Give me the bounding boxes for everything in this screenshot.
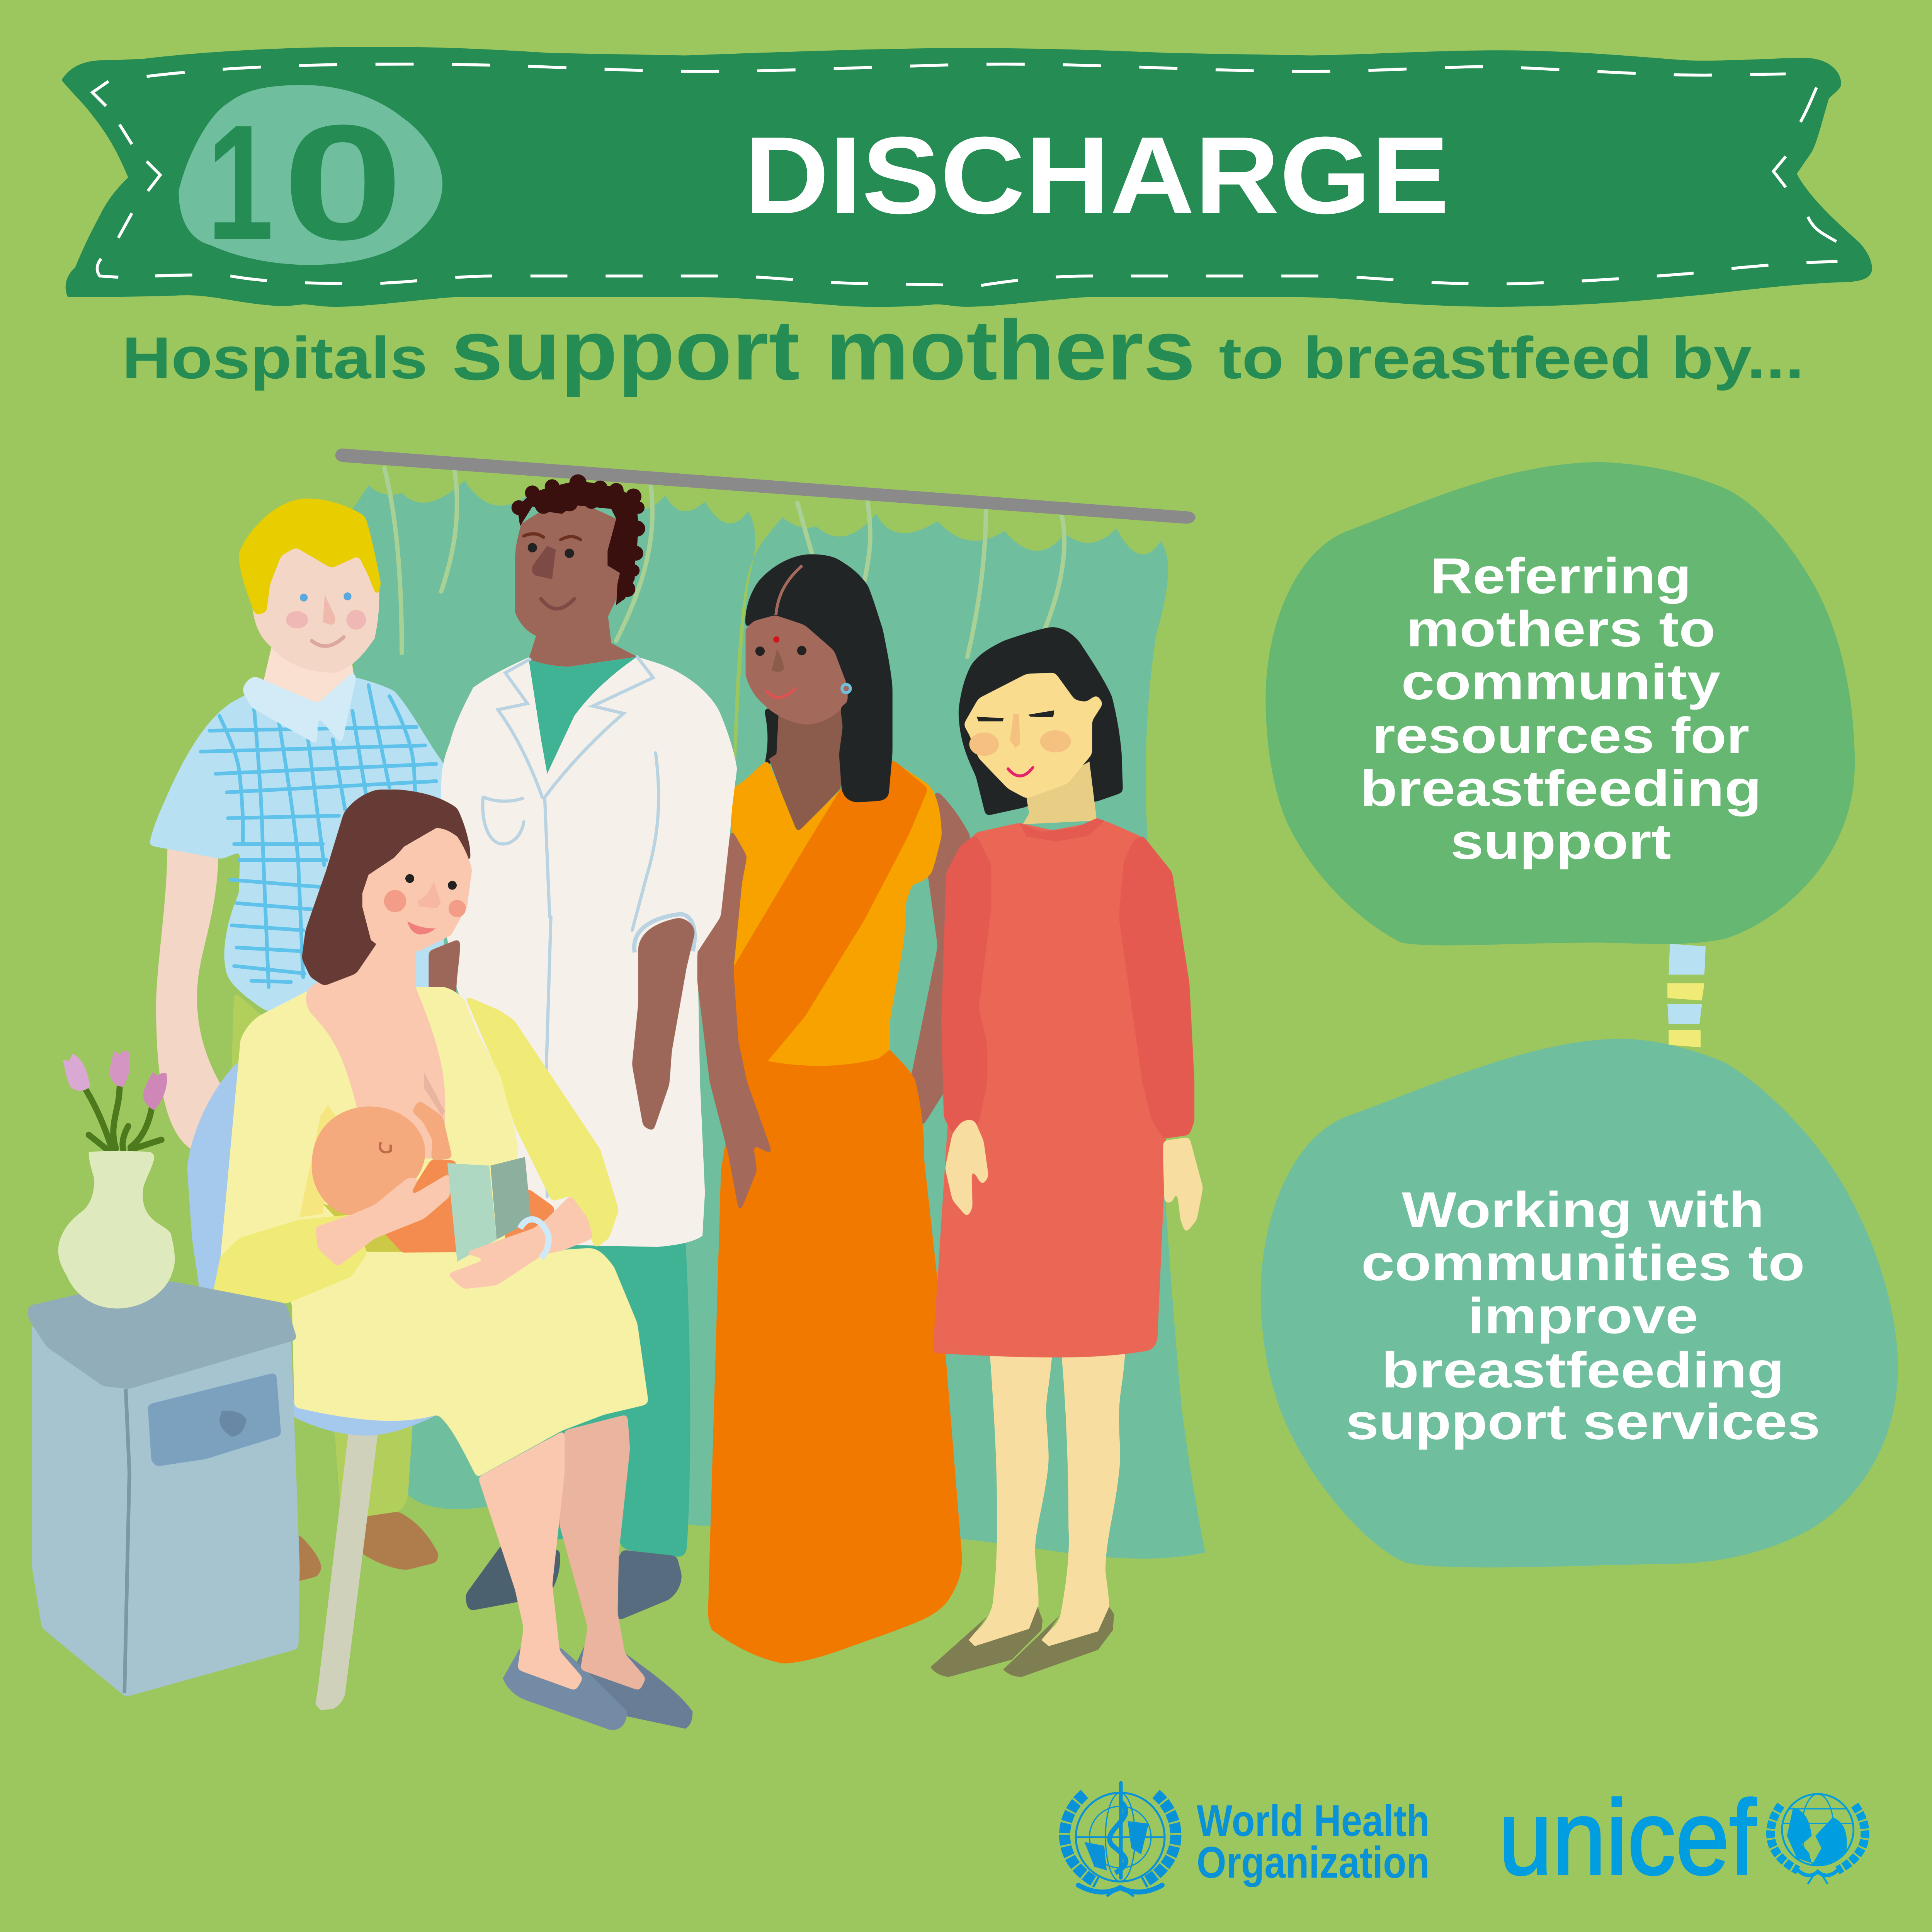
number oval bbox=[179, 85, 442, 265]
bubble text: communities to bbox=[1361, 1235, 1805, 1291]
bindi bbox=[773, 636, 779, 643]
eyes bbox=[300, 594, 308, 602]
bubble text: breastfeeding bbox=[1360, 760, 1762, 816]
neck bbox=[769, 702, 845, 833]
WHO emblem bbox=[1065, 1783, 1176, 1896]
lap sleeve bbox=[213, 1215, 367, 1304]
hair parting bbox=[776, 566, 802, 615]
right leg bbox=[560, 1415, 646, 1690]
connector strip bbox=[1667, 944, 1706, 1047]
subtitle bbox=[122, 303, 1804, 398]
smile bbox=[312, 637, 344, 646]
inner lining bbox=[299, 1105, 335, 1218]
left leg bbox=[478, 1430, 583, 1690]
hands bbox=[945, 1120, 988, 1218]
coat lines bbox=[483, 657, 658, 1196]
right arm bbox=[910, 790, 970, 1128]
bubble text: support services bbox=[1346, 1394, 1820, 1450]
cheeks bbox=[969, 733, 999, 756]
neck bbox=[1023, 762, 1097, 824]
nose bbox=[323, 594, 335, 625]
bubble text: breastfeeding bbox=[1381, 1342, 1784, 1398]
number 10 bbox=[207, 91, 403, 274]
nose bbox=[772, 649, 784, 672]
shoes bbox=[361, 1512, 439, 1570]
bubble text bbox=[1360, 548, 1762, 870]
left shoe bbox=[503, 1644, 627, 1730]
person: woman in red dress bbox=[930, 627, 1203, 1677]
person: blond man bbox=[149, 499, 444, 1583]
drawer knob bbox=[219, 1411, 247, 1437]
unicef emblem bbox=[1770, 1794, 1865, 1884]
chair back bbox=[187, 1061, 259, 1306]
nightstand bbox=[28, 1281, 299, 1697]
banner stitching bbox=[92, 64, 1837, 286]
baby body bbox=[312, 1100, 554, 1253]
head bbox=[746, 615, 848, 724]
eyebrows bbox=[524, 534, 580, 540]
bubble text: Referring bbox=[1430, 548, 1691, 604]
bubble: working bbox=[1261, 1039, 1898, 1567]
legs bbox=[969, 1349, 1053, 1646]
neck bbox=[264, 638, 354, 706]
sleeves bbox=[942, 834, 991, 1134]
nightstand top bbox=[28, 1281, 297, 1389]
bubble text: community bbox=[1401, 654, 1721, 710]
right shoe bbox=[575, 1644, 692, 1729]
number 10: 0 bbox=[282, 91, 403, 274]
ear bbox=[258, 585, 275, 602]
shoes bbox=[930, 1607, 1043, 1677]
sash bbox=[732, 760, 928, 1090]
supporting arm bbox=[315, 1173, 450, 1267]
banner bbox=[61, 47, 1872, 307]
cheeks bbox=[384, 890, 406, 912]
mouth bbox=[407, 921, 436, 935]
nose bbox=[1010, 713, 1020, 748]
head bbox=[515, 495, 629, 649]
mouth bbox=[1008, 768, 1033, 776]
logo: WHO bbox=[1065, 1783, 1430, 1896]
cheeks bbox=[286, 611, 308, 628]
bubble text: Working with bbox=[1402, 1182, 1764, 1238]
nightstand seam bbox=[124, 1389, 129, 1693]
eyes bbox=[977, 710, 1054, 721]
bubble text: mothers to bbox=[1406, 601, 1716, 657]
saree blouse bbox=[732, 760, 942, 1084]
forearm bbox=[632, 918, 694, 1131]
hair bbox=[745, 554, 892, 802]
face bbox=[964, 673, 1103, 798]
WHO wordmark: World Health bbox=[1197, 1796, 1430, 1845]
WHO wordmark: Organization bbox=[1197, 1838, 1430, 1888]
bubble: referring bbox=[1266, 462, 1855, 945]
undershirt bbox=[529, 657, 637, 774]
unicef wordmark: unicef bbox=[1498, 1779, 1757, 1897]
hand on book bbox=[447, 1195, 593, 1289]
face bbox=[362, 828, 472, 954]
shirt bbox=[149, 678, 444, 1013]
hair bbox=[239, 499, 381, 615]
vase bbox=[58, 1151, 175, 1308]
bubble text: support bbox=[1451, 813, 1671, 870]
stems bbox=[86, 1088, 162, 1150]
earring bbox=[842, 684, 850, 693]
arm bbox=[156, 844, 228, 1152]
WHO wordmark bbox=[1197, 1796, 1430, 1888]
trousers bbox=[230, 992, 413, 1519]
bubble text: improve bbox=[1468, 1287, 1698, 1344]
curtain bbox=[351, 468, 1205, 1559]
baby head bbox=[312, 1107, 425, 1215]
person: woman in saree bbox=[708, 554, 970, 1663]
shirt plaid bbox=[201, 685, 436, 987]
curtain rod bbox=[335, 449, 1196, 524]
skirt bbox=[286, 1248, 648, 1477]
mouth bbox=[767, 689, 795, 697]
bubble text bbox=[1346, 1182, 1820, 1450]
curtain gap bbox=[733, 511, 782, 770]
eyes bbox=[528, 543, 537, 553]
curtain hooks bbox=[384, 468, 1064, 657]
shoes bbox=[466, 1545, 560, 1611]
bracelet bbox=[520, 1219, 549, 1258]
person: doctor bbox=[429, 474, 737, 1620]
eyes bbox=[755, 646, 765, 656]
saree woman near arm bbox=[697, 828, 773, 1214]
head bbox=[252, 532, 379, 673]
collar bbox=[1019, 818, 1104, 842]
title: DISCHARGE bbox=[744, 114, 1449, 237]
left arm bbox=[429, 939, 460, 996]
dress bbox=[933, 821, 1171, 1357]
breast shade bbox=[424, 1072, 445, 1116]
tulips bbox=[63, 1053, 90, 1091]
nose bbox=[418, 881, 441, 908]
drawer bbox=[148, 1372, 281, 1466]
right sleeve bbox=[464, 996, 619, 1248]
eyes bbox=[405, 874, 414, 883]
logo: UNICEF bbox=[1498, 1779, 1865, 1897]
neck bbox=[529, 612, 637, 667]
number 10: 1 bbox=[207, 91, 274, 274]
collar bbox=[243, 672, 356, 744]
hair bbox=[512, 474, 645, 605]
subtitle: to breastfeed by... bbox=[1219, 325, 1804, 391]
flowers bbox=[63, 1051, 167, 1150]
hair bbox=[302, 790, 471, 986]
book bbox=[447, 1157, 531, 1262]
bubble text: resources for bbox=[1372, 707, 1749, 764]
chair seat bbox=[292, 1398, 437, 1435]
baby ear bbox=[380, 1142, 391, 1152]
baby arm bbox=[412, 1100, 452, 1161]
hair back bbox=[959, 627, 1123, 816]
nose bbox=[532, 546, 556, 579]
cuff bbox=[634, 914, 695, 952]
trousers bbox=[542, 1232, 690, 1557]
skirt bbox=[708, 1050, 962, 1663]
mouth bbox=[541, 599, 574, 609]
subtitle: support mothers bbox=[451, 303, 1196, 398]
chair leg bbox=[315, 1429, 378, 1710]
coat bbox=[437, 657, 737, 1247]
subtitle: Hospitals bbox=[122, 325, 428, 391]
person: breastfeeding mother bbox=[187, 790, 692, 1730]
skin bbox=[306, 942, 445, 1158]
back hair bbox=[764, 709, 789, 766]
torso jacket bbox=[219, 986, 518, 1269]
